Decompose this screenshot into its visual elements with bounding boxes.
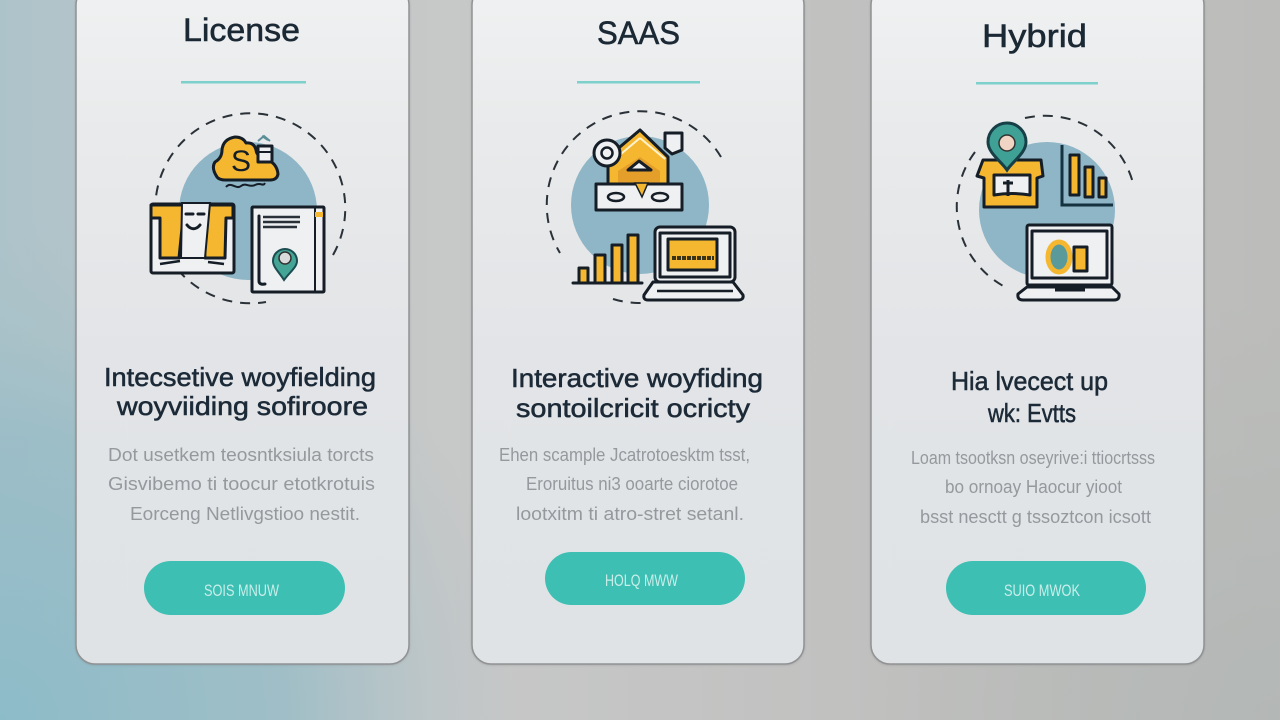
panel: License bbox=[76, 0, 409, 664]
icon: license illustration bbox=[151, 113, 345, 303]
icon: descending bar chart bbox=[1062, 145, 1113, 205]
description: Hybrid: bo ornoay Haocur yioot bbox=[945, 477, 1122, 497]
icon: house with gear bbox=[594, 130, 682, 210]
button: SAAS: HOLQ MWW bbox=[605, 571, 678, 590]
card background: SAAS bbox=[472, 0, 804, 664]
heading: Hybrid: Hybrid bbox=[982, 18, 1087, 54]
icon: booklet with location pin bbox=[252, 207, 324, 292]
icon: bar chart bbox=[573, 235, 642, 283]
button: License bbox=[144, 561, 345, 615]
sub-heading: SAAS: sontoilcricit ocricty bbox=[516, 393, 750, 423]
sub-heading: SAAS: Interactive woyfiding bbox=[511, 363, 763, 393]
description: Hybrid: bsst nesctt g tssoztcon icsott bbox=[920, 507, 1151, 527]
description: SAAS: lootxitm ti atro-stret setanl. bbox=[516, 504, 744, 524]
heading: License: License bbox=[183, 12, 300, 48]
card background: Hybrid bbox=[871, 0, 1204, 664]
sub-heading: SAAS bbox=[511, 363, 763, 423]
sub-heading: License bbox=[104, 362, 376, 421]
icon: storefront box bbox=[151, 203, 234, 273]
button: SAAS bbox=[545, 552, 745, 605]
icon: box with location pin bbox=[977, 123, 1043, 207]
description: SAAS: Ehen scample Jcatrotoesktm tsst, bbox=[499, 445, 750, 465]
sub-heading: License: Intecsetive woyfielding bbox=[104, 362, 376, 392]
description: Hybrid: Loam tsootksn oseyrive:i ttiocrtsss bbox=[911, 448, 1155, 468]
sub-heading: Hybrid: Hia lvecect up bbox=[951, 366, 1108, 396]
description: License: Dot usetkem teosntksiula torcts bbox=[108, 445, 374, 465]
description: License bbox=[108, 445, 375, 524]
panel: SAAS bbox=[472, 0, 804, 664]
description: Hybrid bbox=[911, 448, 1155, 527]
button: License: SOIS MNUW bbox=[204, 581, 279, 600]
description: SAAS: Eroruitus ni3 ooarte ciorotoe bbox=[526, 474, 738, 494]
icon: SaaS illustration bbox=[547, 111, 743, 303]
description: SAAS bbox=[499, 445, 750, 524]
card background: License bbox=[76, 0, 409, 664]
button: Hybrid: SUIO MWOK bbox=[1004, 581, 1080, 600]
icon: laptop bbox=[1018, 225, 1119, 300]
description: License: Eorceng Netlivgstioo nestit. bbox=[130, 504, 360, 524]
icon: money cloud: S bbox=[231, 145, 251, 178]
button: Hybrid bbox=[946, 561, 1146, 615]
sub-heading: License: woyviiding sofiroore bbox=[116, 391, 368, 421]
icon: laptop bbox=[644, 227, 743, 300]
icon: hybrid illustration bbox=[957, 116, 1133, 300]
heading: SAAS: SAAS bbox=[597, 15, 680, 51]
icon: money cloud bbox=[213, 136, 278, 187]
sub-heading: Hybrid bbox=[951, 366, 1108, 428]
description: License: Gisvibemo ti toocur etotkrotuis bbox=[108, 474, 375, 494]
sub-heading: Hybrid: wk: Evtts bbox=[987, 398, 1076, 428]
panel: Hybrid bbox=[871, 0, 1204, 664]
